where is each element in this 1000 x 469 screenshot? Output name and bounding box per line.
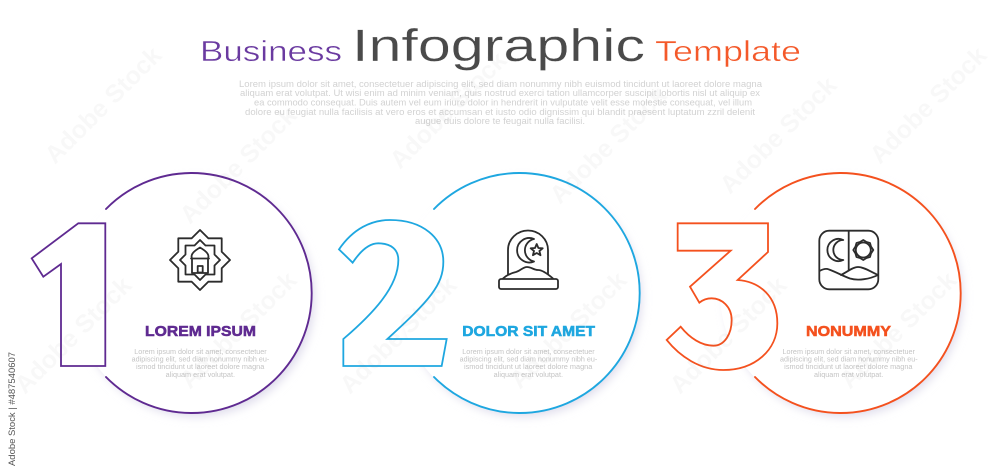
heading: Dolor Sit Amet: DOLOR SIT AMET [462,324,595,340]
circle shadow [78,180,314,416]
intro text block: Lorem ipsum dolor sit amet, consectetuer adipiscing elit, sed diam nonummy nibh euismod tincidunt ut laoreet dolore magna [239,79,762,89]
vertical stock id: Adobe Stock | #487540607 [7,352,18,466]
text block: step 2 [460,349,598,379]
text block: step 2: Lorem ipsum dolor sit amet, consectetuer [462,349,595,356]
icon: star with mosque [170,230,230,290]
watermark pattern: Adobe Stock [334,271,462,399]
text block: step 3: adipiscing elit, sed diam nonummy nibh eu- [780,356,918,364]
watermark pattern: Adobe Stock [544,81,672,209]
intro text block: ea commodo consequat. Duis autem vel eum iriure dolor in hendrerit in vulputate velit esse molestie consequat, vel illum [254,98,752,108]
text block: step 1: aliquam erat volutpat. [166,372,235,379]
watermark pattern: Adobe Stock [384,46,512,174]
watermark pattern: Adobe Stock [664,271,792,399]
heading: Lorem Ipsum: LOREM IPSUM [145,324,256,340]
circle shadow [726,180,962,416]
heading: Nonummy: NONUMMY [806,324,891,340]
watermark pattern: Adobe Stock [9,271,137,399]
intro text block: dolore eu feugiat nulla facilisis at vero eros et accumsan et iusto odio dignissim qui blandit praesent luptatum zzril delenit [245,107,756,117]
panel: step 3 [667,173,962,416]
text block: step 1: Lorem ipsum dolor sit amet, consectetuer [134,349,267,356]
icon: gravestone with crescent [499,230,558,289]
title: Infographic [352,20,645,71]
watermark pattern: Adobe Stock [174,101,302,229]
text block: step 2: aliquam erat volutpat. [494,372,563,379]
circle outline [720,173,961,413]
text block: step 2: ismod tincidunt ut laoreet dolore magna [464,364,592,371]
title: Business [200,36,342,68]
watermark pattern: Adobe Stock [864,41,992,169]
circle outline [72,173,312,413]
panel: step 2 [339,173,641,416]
intro text block: augue duis dolore te feugait nulla facilisi. [415,116,585,126]
text block: step 3: aliquam erat volutpat. [814,372,883,379]
numeral 1 [32,223,105,366]
watermark pattern: Adobe Stock [834,266,962,394]
intro text block: aliquam erat volutpat. Ut wisi enim ad minim veniam, quis nostrud exerci tation ullamcorper suscipit lobortis nisl ut aliquip ex [240,88,761,98]
watermark pattern: Adobe Stock [504,266,632,394]
circle shadow [405,180,641,416]
title: Template [655,36,801,68]
text block: step 3: Lorem ipsum dolor sit amet, consectetuer [782,349,916,356]
watermark pattern: Adobe Stock [174,266,302,394]
watermark pattern: Adobe Stock [714,71,842,199]
watermark pattern: Adobe Stock [39,41,167,169]
circle outline [399,173,640,413]
icon: day and night desert [819,231,878,289]
text block: step 3 [780,349,918,379]
numeral 3 [667,223,777,370]
text block: step 1: adipiscing elit, sed diam nonummy nibh eu- [132,356,270,364]
text block: step 1 [132,349,270,379]
panel: step 1 [32,173,314,416]
numeral 2 [339,220,447,366]
text block: step 2: adipiscing elit, sed diam nonummy nibh eu- [460,356,598,364]
text block: step 3: ismod tincidunt ut laoreet dolore magna [784,364,913,371]
watermark pattern [9,41,992,399]
intro text block [239,79,762,126]
title [200,20,801,71]
text block: step 1: ismod tincidunt ut laoreet dolore magna [136,364,264,371]
